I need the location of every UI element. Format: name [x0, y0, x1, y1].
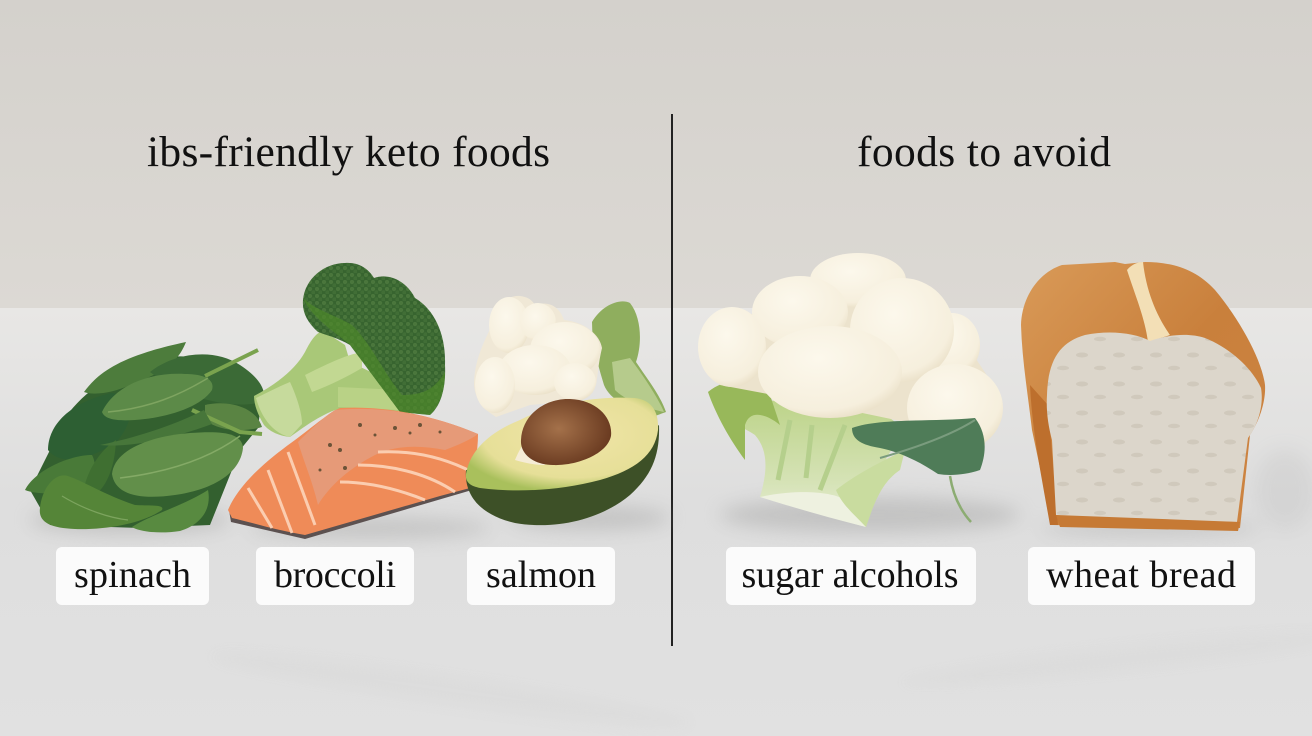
title: ibs-friendly keto foods: ibs-friendly keto foods: [147, 128, 550, 176]
label: spinach: [56, 547, 209, 605]
marble table: [0, 308, 1312, 736]
leaf: [852, 418, 985, 522]
icon: avocado half: [466, 398, 659, 525]
icon: small cauliflower with leaf: [474, 296, 666, 417]
food shadows: [30, 450, 1312, 538]
wall background: [0, 0, 1312, 310]
label: spinach: spinach: [74, 554, 191, 596]
label: wheat bread: [1028, 547, 1255, 605]
avocado pit: [515, 399, 611, 465]
label: wheat bread: wheat bread: [1046, 554, 1236, 596]
icon: broccoli: [254, 263, 445, 437]
icon: bread loaf: [1021, 262, 1265, 531]
center divider line: [671, 114, 673, 646]
label: sugar alcohols: [726, 547, 976, 605]
label: salmon: [467, 547, 615, 605]
label: broccoli: broccoli: [274, 554, 396, 596]
icon: large cauliflower: [698, 253, 1003, 527]
label: broccoli: [256, 547, 414, 605]
icon: spinach leaves: [25, 342, 264, 532]
title: foods to avoid: foods to avoid: [857, 128, 1111, 176]
icon: salmon fillet: [228, 408, 478, 539]
label: sugar alcohols: sugar alcohols: [742, 554, 958, 596]
label: salmon: salmon: [486, 554, 596, 596]
bread slice face: [1047, 333, 1262, 522]
